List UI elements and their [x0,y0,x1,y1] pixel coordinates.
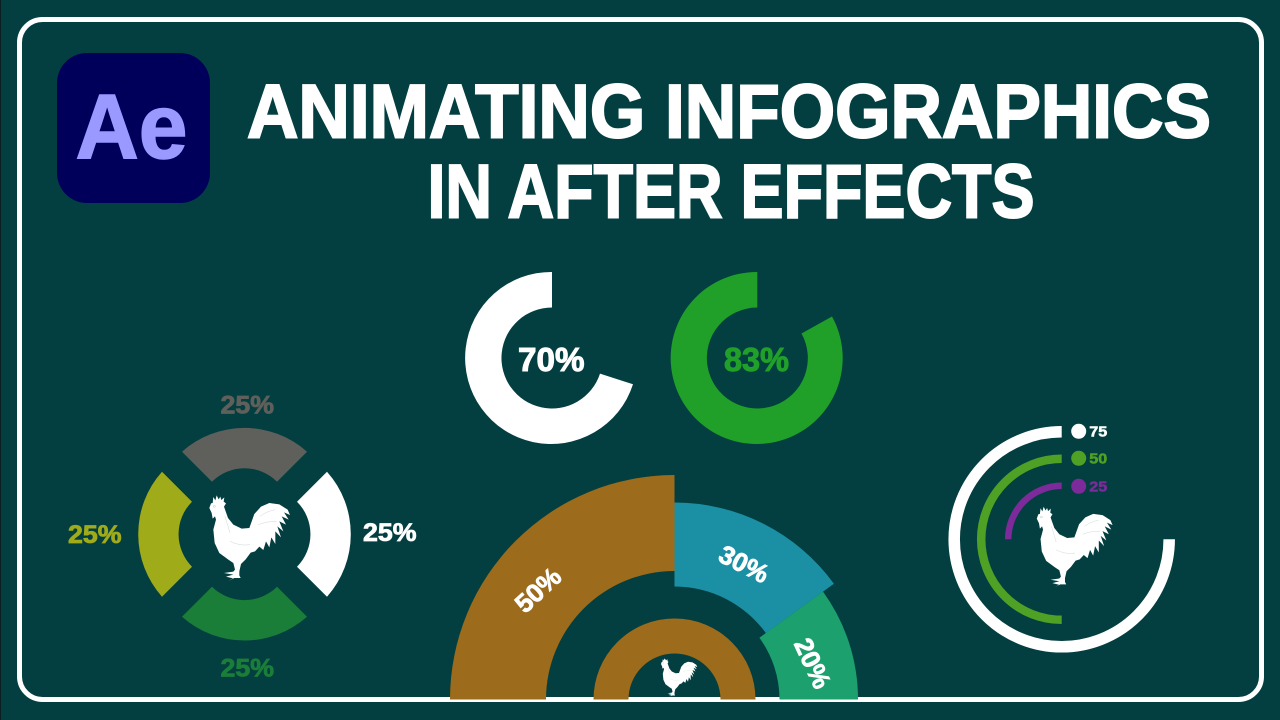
arc: green 50 [981,459,1062,620]
icon: After Effects logo [57,53,210,203]
arc: white 75 [954,432,1169,647]
label: white 25%: 25% [363,519,416,547]
semicircular multi-radius chart [450,475,858,700]
title: ANIMATING INFOGRAPHICS [247,70,1211,154]
title: IN AFTER EFFECTS [428,150,1034,234]
segment: sea green 20% [759,592,858,700]
label: 50%: 50% [509,561,567,619]
legend: 75: 75 [1089,424,1107,440]
title [247,70,1211,234]
label: 20%: 20% [788,633,837,693]
segment: olive left [138,472,192,597]
icon: rooster [661,658,697,697]
label: olive 25%: 25% [68,521,122,549]
icon: After Effects logo: Ae [76,76,188,178]
legend: 50: 50 [1089,452,1107,468]
concentric arc chart [954,424,1169,647]
arc: purple 25 [1008,486,1062,539]
label: gray 25%: 25% [220,392,274,420]
inner brown ring [594,618,756,700]
segment: dark green bottom [182,587,307,640]
icon: rooster [1037,507,1113,587]
donut chart: 83%: 83% [724,341,789,378]
legend: 25: 25 [1089,480,1107,496]
label: 30%: 30% [714,539,774,589]
four-segment ring chart [68,392,416,682]
donut chart: 70% [465,272,633,444]
legend: 75 [1071,424,1107,440]
label: green 25%: 25% [220,654,274,682]
donut chart: 70%: 70% [518,341,584,378]
legend: 25 [1071,479,1107,496]
segment: teal 30% [674,502,834,633]
legend: 50 [1071,451,1107,468]
segment: white right [297,472,351,597]
segment: brown 50% [450,475,674,700]
donut chart: 83% [671,272,843,444]
segment: gray top [182,428,307,482]
icon: rooster [209,495,290,581]
